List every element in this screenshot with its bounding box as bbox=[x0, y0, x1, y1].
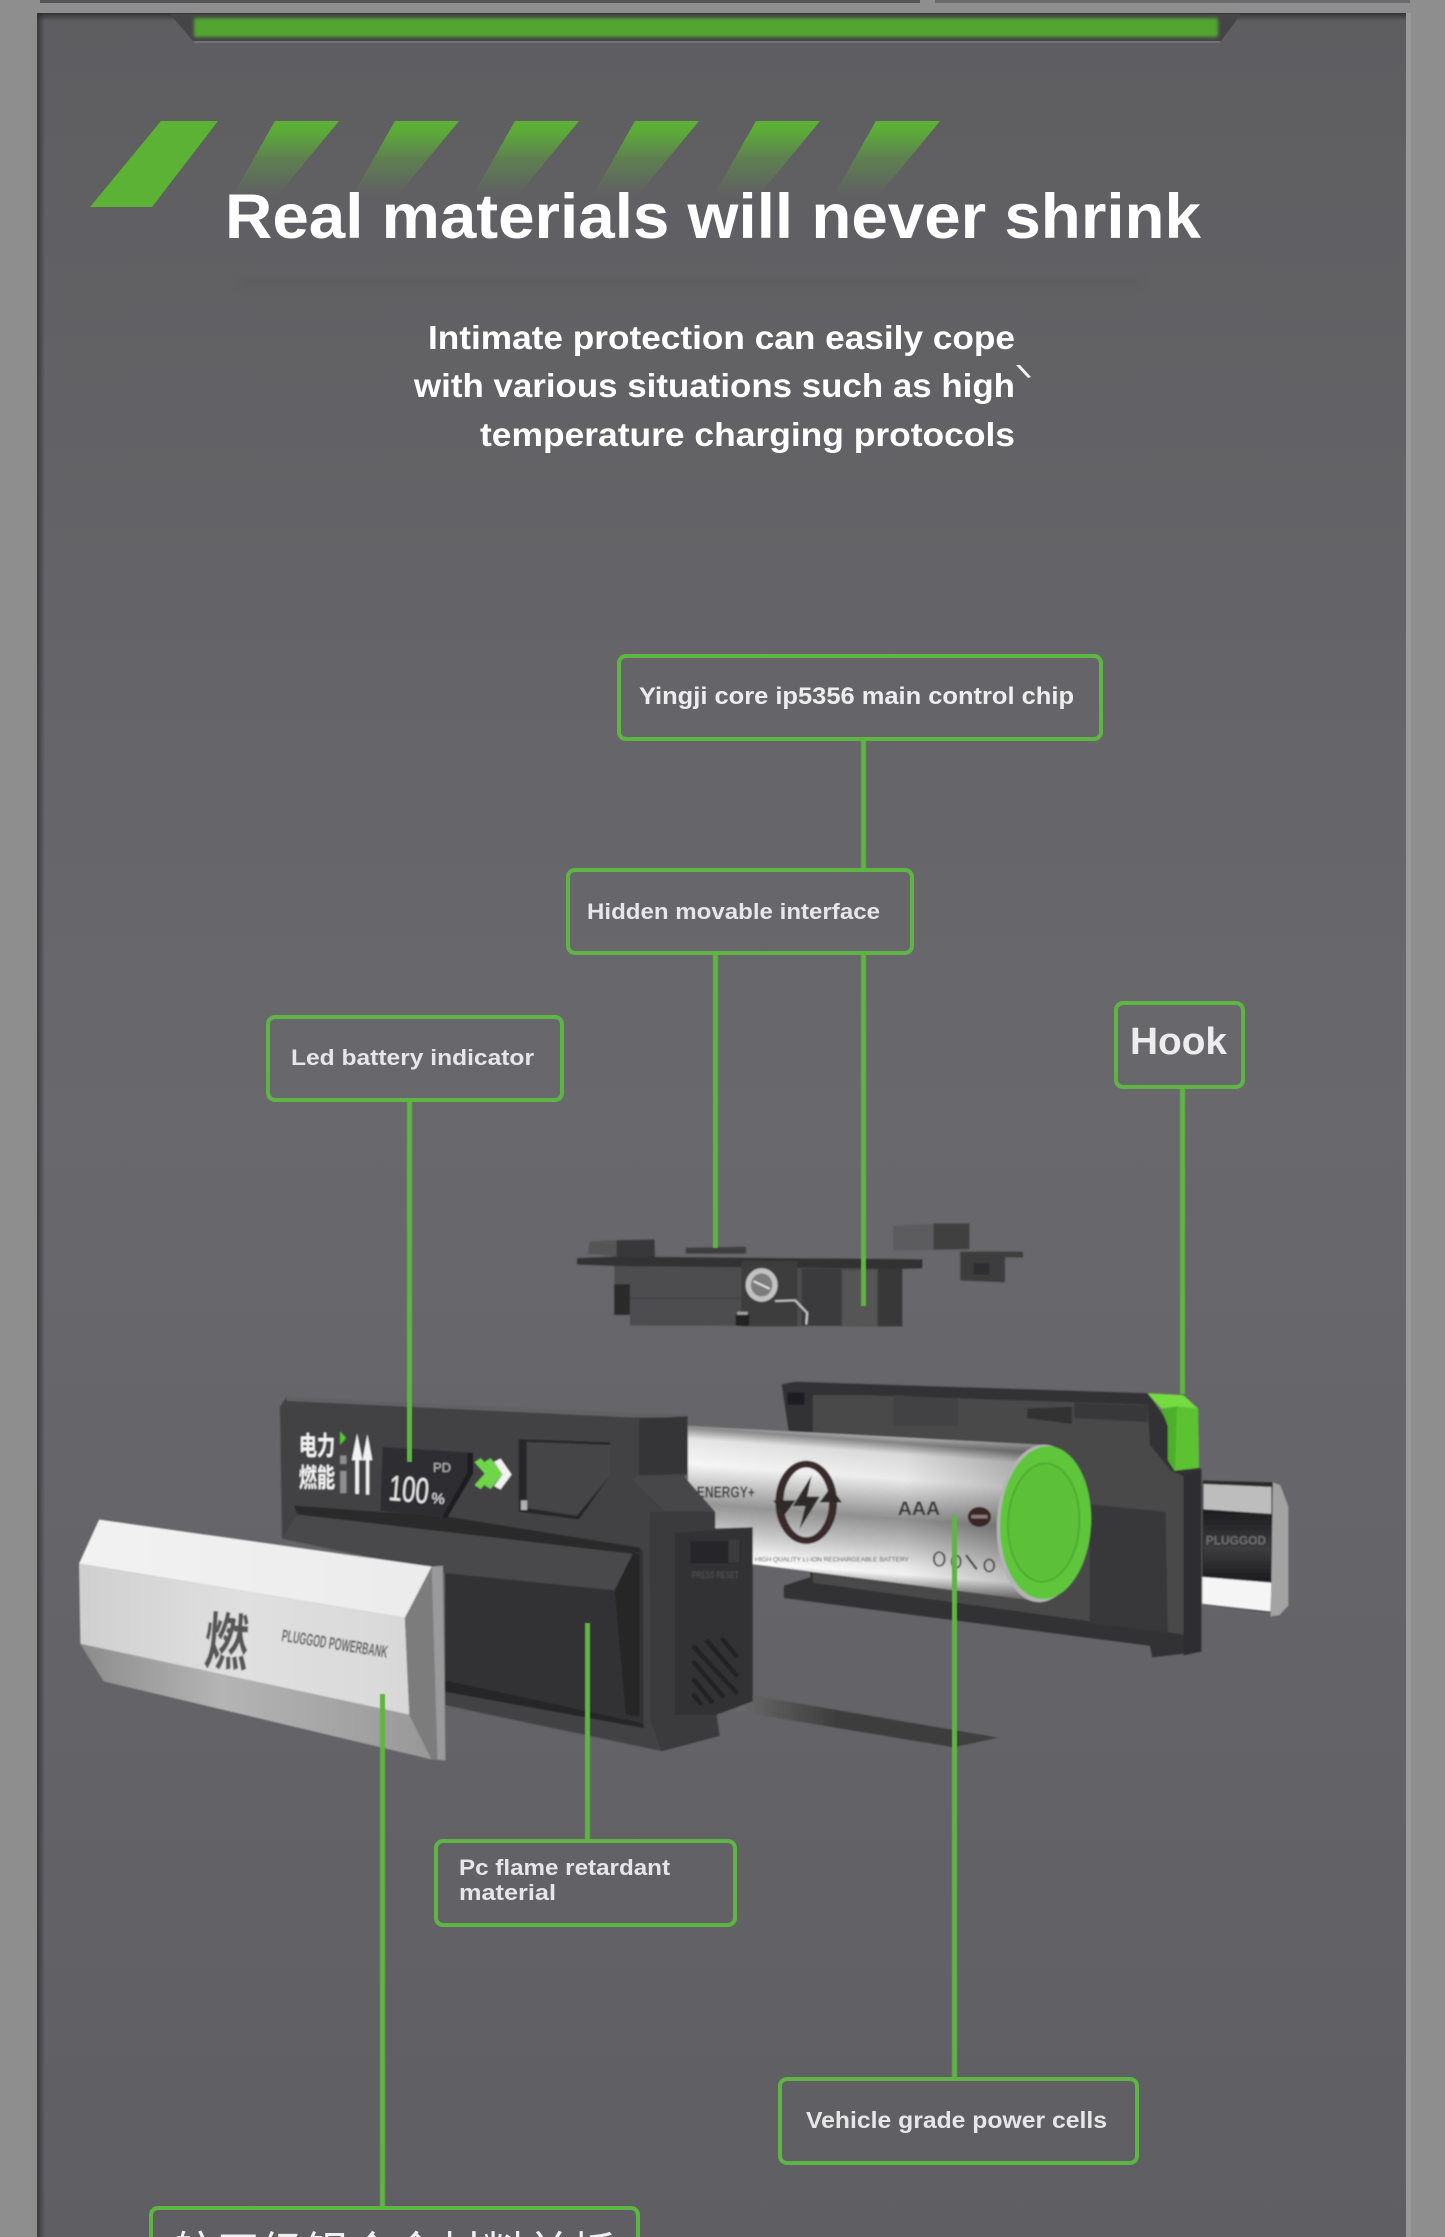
LED display readout: PD bbox=[433, 1460, 451, 1475]
stray accent mark bbox=[1016, 365, 1031, 378]
callout: PC material: Pc flame retardant bbox=[459, 1855, 671, 1880]
front casing: PRESS RESET bbox=[692, 1571, 739, 1581]
LED display readout: 100 bbox=[387, 1467, 431, 1511]
callout: cover material (clipped at page bottom) bbox=[151, 2208, 638, 2237]
battery cell: HIGH QUALITY LI-ION RECHARGEABLE BATTERY bbox=[755, 1557, 909, 1563]
hatch vent bbox=[693, 1638, 737, 1705]
callout: main control chip bbox=[619, 656, 1101, 739]
callout: hidden interface: Hidden movable interface bbox=[587, 899, 880, 924]
battery cell bbox=[688, 1426, 1094, 1604]
up arrows and level bars bbox=[340, 1432, 372, 1495]
title: Real materials will never shrink bbox=[225, 182, 1202, 252]
callout: main control chip: Yingji core ip5356 main control chip bbox=[639, 683, 1074, 710]
faint ghost smudge under title bbox=[240, 278, 1140, 288]
battery green end cap bbox=[994, 1443, 1094, 1604]
rear window cutout bbox=[519, 1439, 610, 1520]
chevrons bbox=[478, 1460, 507, 1488]
back shell with green hook bbox=[782, 1382, 1201, 1657]
callout connector lines bbox=[380, 740, 1185, 2208]
callout: hook bbox=[1116, 1003, 1243, 1087]
LED display readout: % bbox=[431, 1490, 445, 1508]
cover engraved character and brand: 燃 bbox=[202, 1608, 251, 1680]
device brand text bbox=[299, 1431, 335, 1493]
LED display window bbox=[380, 1447, 473, 1518]
subtitle text block bbox=[413, 319, 1015, 453]
battery cell: AAA bbox=[898, 1498, 940, 1520]
callout: PC material: material bbox=[459, 1880, 556, 1905]
callout: power cells: Vehicle grade power cells bbox=[806, 2107, 1107, 2133]
cover engraved character and brand: PLUGGOD POWERBANK bbox=[280, 1626, 389, 1662]
top module: hidden interface and control chip bbox=[577, 1224, 1023, 1326]
callout: LED indicator bbox=[268, 1017, 562, 1100]
subtitle text block: temperature charging protocols bbox=[480, 416, 1015, 453]
callout: hook: Hook bbox=[1130, 1021, 1228, 1063]
lower band and recess bbox=[293, 1505, 644, 1554]
silver rear part bbox=[1202, 1481, 1288, 1616]
top edge strip of previous panel bbox=[40, 0, 1410, 3]
top green light bar bbox=[170, 14, 1241, 43]
front casing bbox=[280, 1397, 753, 1751]
silver rear part: PLUGGOD bbox=[1206, 1533, 1266, 1547]
callout: hidden interface bbox=[568, 870, 912, 953]
hook bbox=[1148, 1393, 1199, 1471]
cover engraved character and brand bbox=[202, 1608, 389, 1680]
subtitle text block: with various situations such as high bbox=[413, 367, 1015, 404]
shadow strip under battery bbox=[735, 1696, 998, 1747]
callout: PC material bbox=[436, 1841, 735, 1925]
device brand text: 电力 bbox=[299, 1431, 335, 1461]
decorative green slanted stripes bbox=[90, 121, 940, 207]
battery branding: ENERGY+ bbox=[697, 1484, 755, 1501]
subtitle text block: Intimate protection can easily cope bbox=[428, 319, 1015, 356]
silver front cover bbox=[79, 1520, 446, 1761]
callout: power cells bbox=[780, 2079, 1137, 2163]
exploded product illustration bbox=[79, 1224, 1288, 1761]
device brand text: 燃能 bbox=[299, 1463, 335, 1493]
battery recycle bolt logo bbox=[773, 1464, 842, 1541]
callout: LED indicator: Led battery indicator bbox=[291, 1045, 534, 1070]
